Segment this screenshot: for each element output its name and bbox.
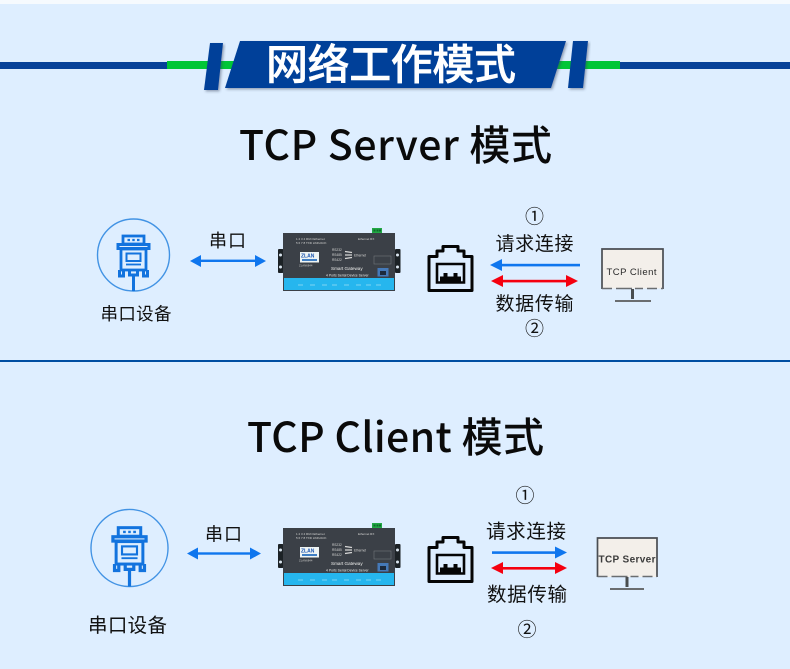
label: step two circled number: ② — [518, 615, 537, 642]
arrow: request to device — [490, 259, 580, 271]
label: serial device: 串口设备 — [88, 609, 167, 638]
device: smart gateway: ZLAN — [301, 254, 315, 260]
label: serial port: 串口 — [205, 520, 242, 546]
heading: TCP Client mode: TCP Client 模式 — [247, 404, 544, 464]
device: smart gateway: Smart Gateway — [331, 561, 363, 566]
arrow: serial link — [190, 255, 266, 267]
label: serial device: 串口设备 — [100, 301, 172, 326]
label: step two circled number: ② — [525, 314, 544, 341]
arrow: request to server — [492, 546, 567, 558]
label: step one circled number: ① — [516, 481, 535, 508]
device: smart gateway: 4 Ports Serial Device Server — [326, 274, 369, 278]
arrow: data transfer — [491, 562, 567, 574]
device: smart gateway: RS422 — [332, 258, 342, 262]
device: smart gateway: 5 6 7 8 TXD LINK/ACK — [296, 241, 326, 245]
icon: monitor, TCP server: TCP Server — [598, 554, 656, 566]
device: smart gateway: ZLAN6844 — [299, 264, 313, 268]
device: smart gateway — [278, 523, 400, 586]
device: smart gateway: 1 2 3 4 RUN Ethernet — [296, 237, 325, 241]
icon: monitor, TCP client: TCP Client — [606, 267, 657, 278]
device: smart gateway: Ethernet RX — [358, 237, 374, 241]
label: data transfer: 数据传输 — [487, 578, 567, 607]
device: smart gateway: 4 Ports Serial Device Server — [326, 568, 369, 572]
icon: monitor, TCP server — [597, 538, 657, 590]
device: smart gateway: 5 6 7 8 TXD LINK/ACK — [296, 536, 326, 540]
icon: serial device — [91, 509, 168, 587]
label: data transfer: 数据传输 — [496, 289, 574, 316]
icon: serial device — [98, 219, 170, 291]
arrow: data transfer — [491, 275, 578, 287]
device: smart gateway: RS232 — [332, 543, 342, 547]
title banner: 网络工作模式 — [266, 32, 516, 92]
icon: ethernet port — [429, 538, 472, 582]
section divider — [0, 360, 790, 362]
device: smart gateway: RS485 — [332, 548, 342, 552]
device: smart gateway — [278, 228, 400, 291]
device: smart gateway: Ethernet RX — [358, 532, 374, 536]
device: smart gateway: 1 2 3 4 RUN Ethernet — [296, 532, 325, 536]
heading: TCP Server mode: TCP Server 模式 — [239, 112, 552, 172]
device: smart gateway: Ethernet — [354, 548, 366, 552]
title banner — [0, 32, 790, 92]
label: step one circled number: ① — [525, 202, 544, 229]
device: smart gateway: Smart Gateway — [331, 266, 363, 271]
label: connection request: 请求连接 — [486, 515, 566, 544]
device: smart gateway: RS422 — [332, 553, 342, 557]
label: serial port: 串口 — [209, 227, 246, 253]
icon: monitor, TCP client — [602, 248, 663, 302]
device: smart gateway: RS485 — [332, 253, 342, 257]
device: smart gateway: ZLAN — [301, 548, 315, 554]
icon: ethernet port — [429, 246, 472, 290]
device: smart gateway: RS232 — [332, 248, 342, 252]
device: smart gateway: Ethernet — [354, 254, 366, 258]
label: connection request: 请求连接 — [496, 229, 574, 256]
arrow: serial link — [187, 548, 261, 560]
device: smart gateway: ZLAN6844 — [299, 558, 313, 562]
